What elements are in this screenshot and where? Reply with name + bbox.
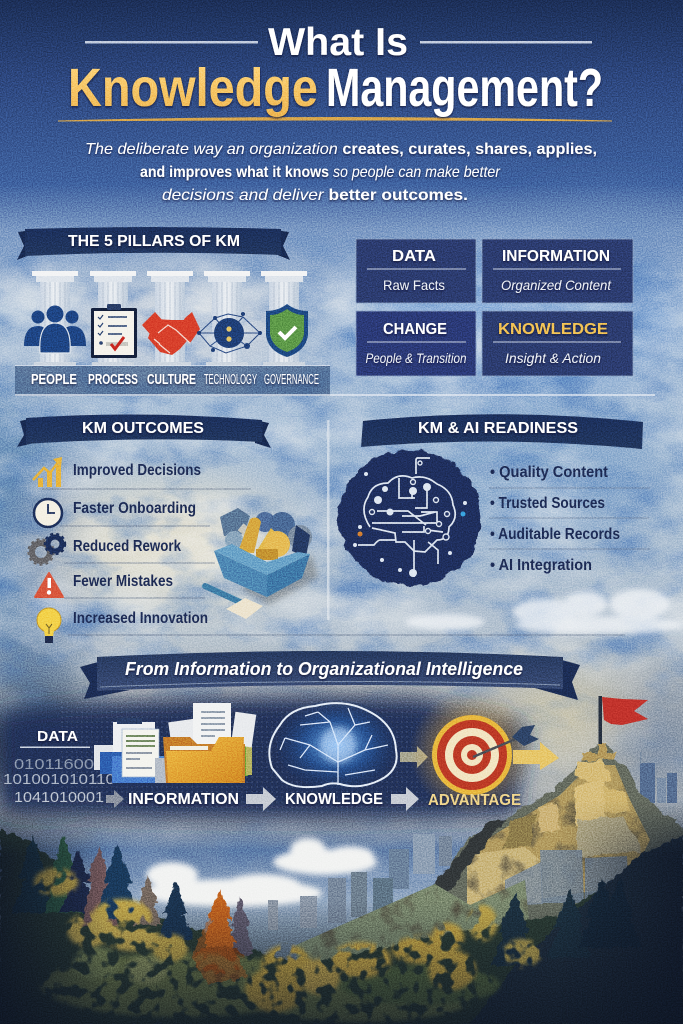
pillar labels: GOVERNANCE: [264, 372, 319, 388]
pillar labels: PROCESS: [88, 372, 138, 388]
banner: flow heading: [80, 651, 580, 700]
banner: the 5 pillars of km: [17, 227, 290, 260]
pillar labels: CULTURE: [147, 372, 196, 388]
card: knowledge: KNOWLEDGE: [498, 321, 608, 338]
data label and binary: DATA: [37, 729, 79, 745]
outcome: increased innovation: Increased Innovation: [73, 610, 208, 627]
foreground forest: [0, 830, 683, 1024]
intro text: [85, 141, 597, 204]
data label and binary: 101001010110: [3, 771, 115, 788]
title: Management?: [326, 58, 603, 118]
readiness list: [490, 464, 620, 574]
icon: documents and folder: [94, 703, 256, 783]
data label and binary: 1041010001: [14, 789, 104, 806]
outcome: improved decisions: Improved Decisions: [73, 462, 201, 479]
data label and binary: [3, 729, 115, 806]
flow labels: KNOWLEDGE: [285, 791, 383, 808]
outcome: improved decisions: [33, 457, 201, 487]
card: information: INFORMATION: [502, 248, 610, 265]
pillar columns: [32, 271, 307, 366]
icon: circuit brain: [339, 450, 481, 586]
icon: glowing brain: [269, 700, 397, 790]
card: data: [356, 239, 476, 303]
icon: governance shield: [266, 304, 308, 357]
card: knowledge: Insight & Action: [505, 350, 601, 366]
icon: people: [24, 306, 86, 353]
icon: technology network: [197, 312, 262, 353]
card: information: [482, 239, 633, 303]
title: What Is: [268, 21, 408, 64]
clouds: [142, 838, 377, 907]
banner: km and ai readiness: KM & AI READINESS: [418, 420, 578, 437]
readiness list: • Auditable Records: [490, 526, 620, 543]
dark flow band: [0, 696, 525, 820]
flow labels: ADVANTAGE: [428, 792, 521, 809]
banner: km outcomes: [17, 414, 271, 448]
banner: the 5 pillars of km: THE 5 PILLARS OF KM: [68, 233, 240, 250]
outcome: faster onboarding: [34, 499, 196, 527]
outcome: fewer mistakes: [35, 573, 173, 597]
card: data: DATA: [392, 248, 436, 265]
mountain: [296, 743, 683, 1024]
edge vignette: [0, 800, 683, 1024]
landscape illustration: [0, 696, 683, 1024]
pillar labels: TECHNOLOGY: [204, 372, 257, 388]
data label and binary: 01011600: [14, 756, 94, 773]
panel: km and ai readiness: [339, 414, 650, 586]
readiness list: • Trusted Sources: [490, 495, 605, 512]
outcome: faster onboarding: Faster Onboarding: [73, 500, 196, 517]
label strip: [15, 365, 330, 396]
card: information: Organized Content: [501, 277, 612, 293]
panel: from information to organizational intelligence: [3, 651, 580, 814]
intro text: The deliberate way an organization creates, curates, shares, applies,: [85, 141, 597, 158]
card: change: People & Transition: [366, 350, 467, 366]
arrow: information to knowledge: [246, 787, 276, 811]
flag on summit: [598, 696, 648, 744]
foliage clusters: [34, 868, 542, 1022]
icon: process clipboard: [91, 304, 137, 358]
illustration: box of knowledge pieces: [205, 508, 318, 619]
title: [58, 21, 612, 121]
flow labels: [128, 791, 521, 809]
arrow: data to information: [106, 790, 124, 808]
flow labels: INFORMATION: [128, 791, 239, 808]
card: change: [356, 311, 476, 376]
title: Knowledge: [68, 58, 318, 118]
intro text: and improves what it knows so people can make better: [140, 164, 501, 181]
panel: the 5 pillars: [15, 227, 330, 396]
outcome: reduced rework: [28, 534, 181, 564]
outcome: increased innovation: [37, 608, 208, 643]
pillar labels: PEOPLE: [31, 372, 77, 388]
outcome: reduced rework: Reduced Rework: [73, 538, 181, 555]
card: knowledge: [482, 311, 633, 376]
icon: culture handshake: [142, 312, 200, 355]
arrow: knowledge to advantage: [391, 787, 419, 811]
city skyline: [268, 752, 677, 930]
icon: target: [410, 690, 539, 814]
panel: definitions grid: [356, 239, 633, 376]
readiness list: • Quality Content: [490, 464, 608, 481]
banner: km outcomes: KM OUTCOMES: [82, 420, 204, 437]
banner: flow heading: From Information to Organizational Intelligence: [125, 658, 523, 679]
arrow: knowledge to target: [400, 746, 428, 768]
pillar labels: [31, 372, 319, 388]
banner: km and ai readiness: [361, 414, 643, 449]
card: change: CHANGE: [383, 321, 447, 338]
intro text: decisions and deliver better outcomes.: [162, 187, 468, 204]
card: data: Raw Facts: [383, 277, 445, 293]
panel: km outcomes: [17, 414, 625, 643]
readiness list: • AI Integration: [490, 557, 592, 574]
arrow: gold to summit: [513, 742, 559, 770]
outcome: fewer mistakes: Fewer Mistakes: [73, 573, 173, 590]
